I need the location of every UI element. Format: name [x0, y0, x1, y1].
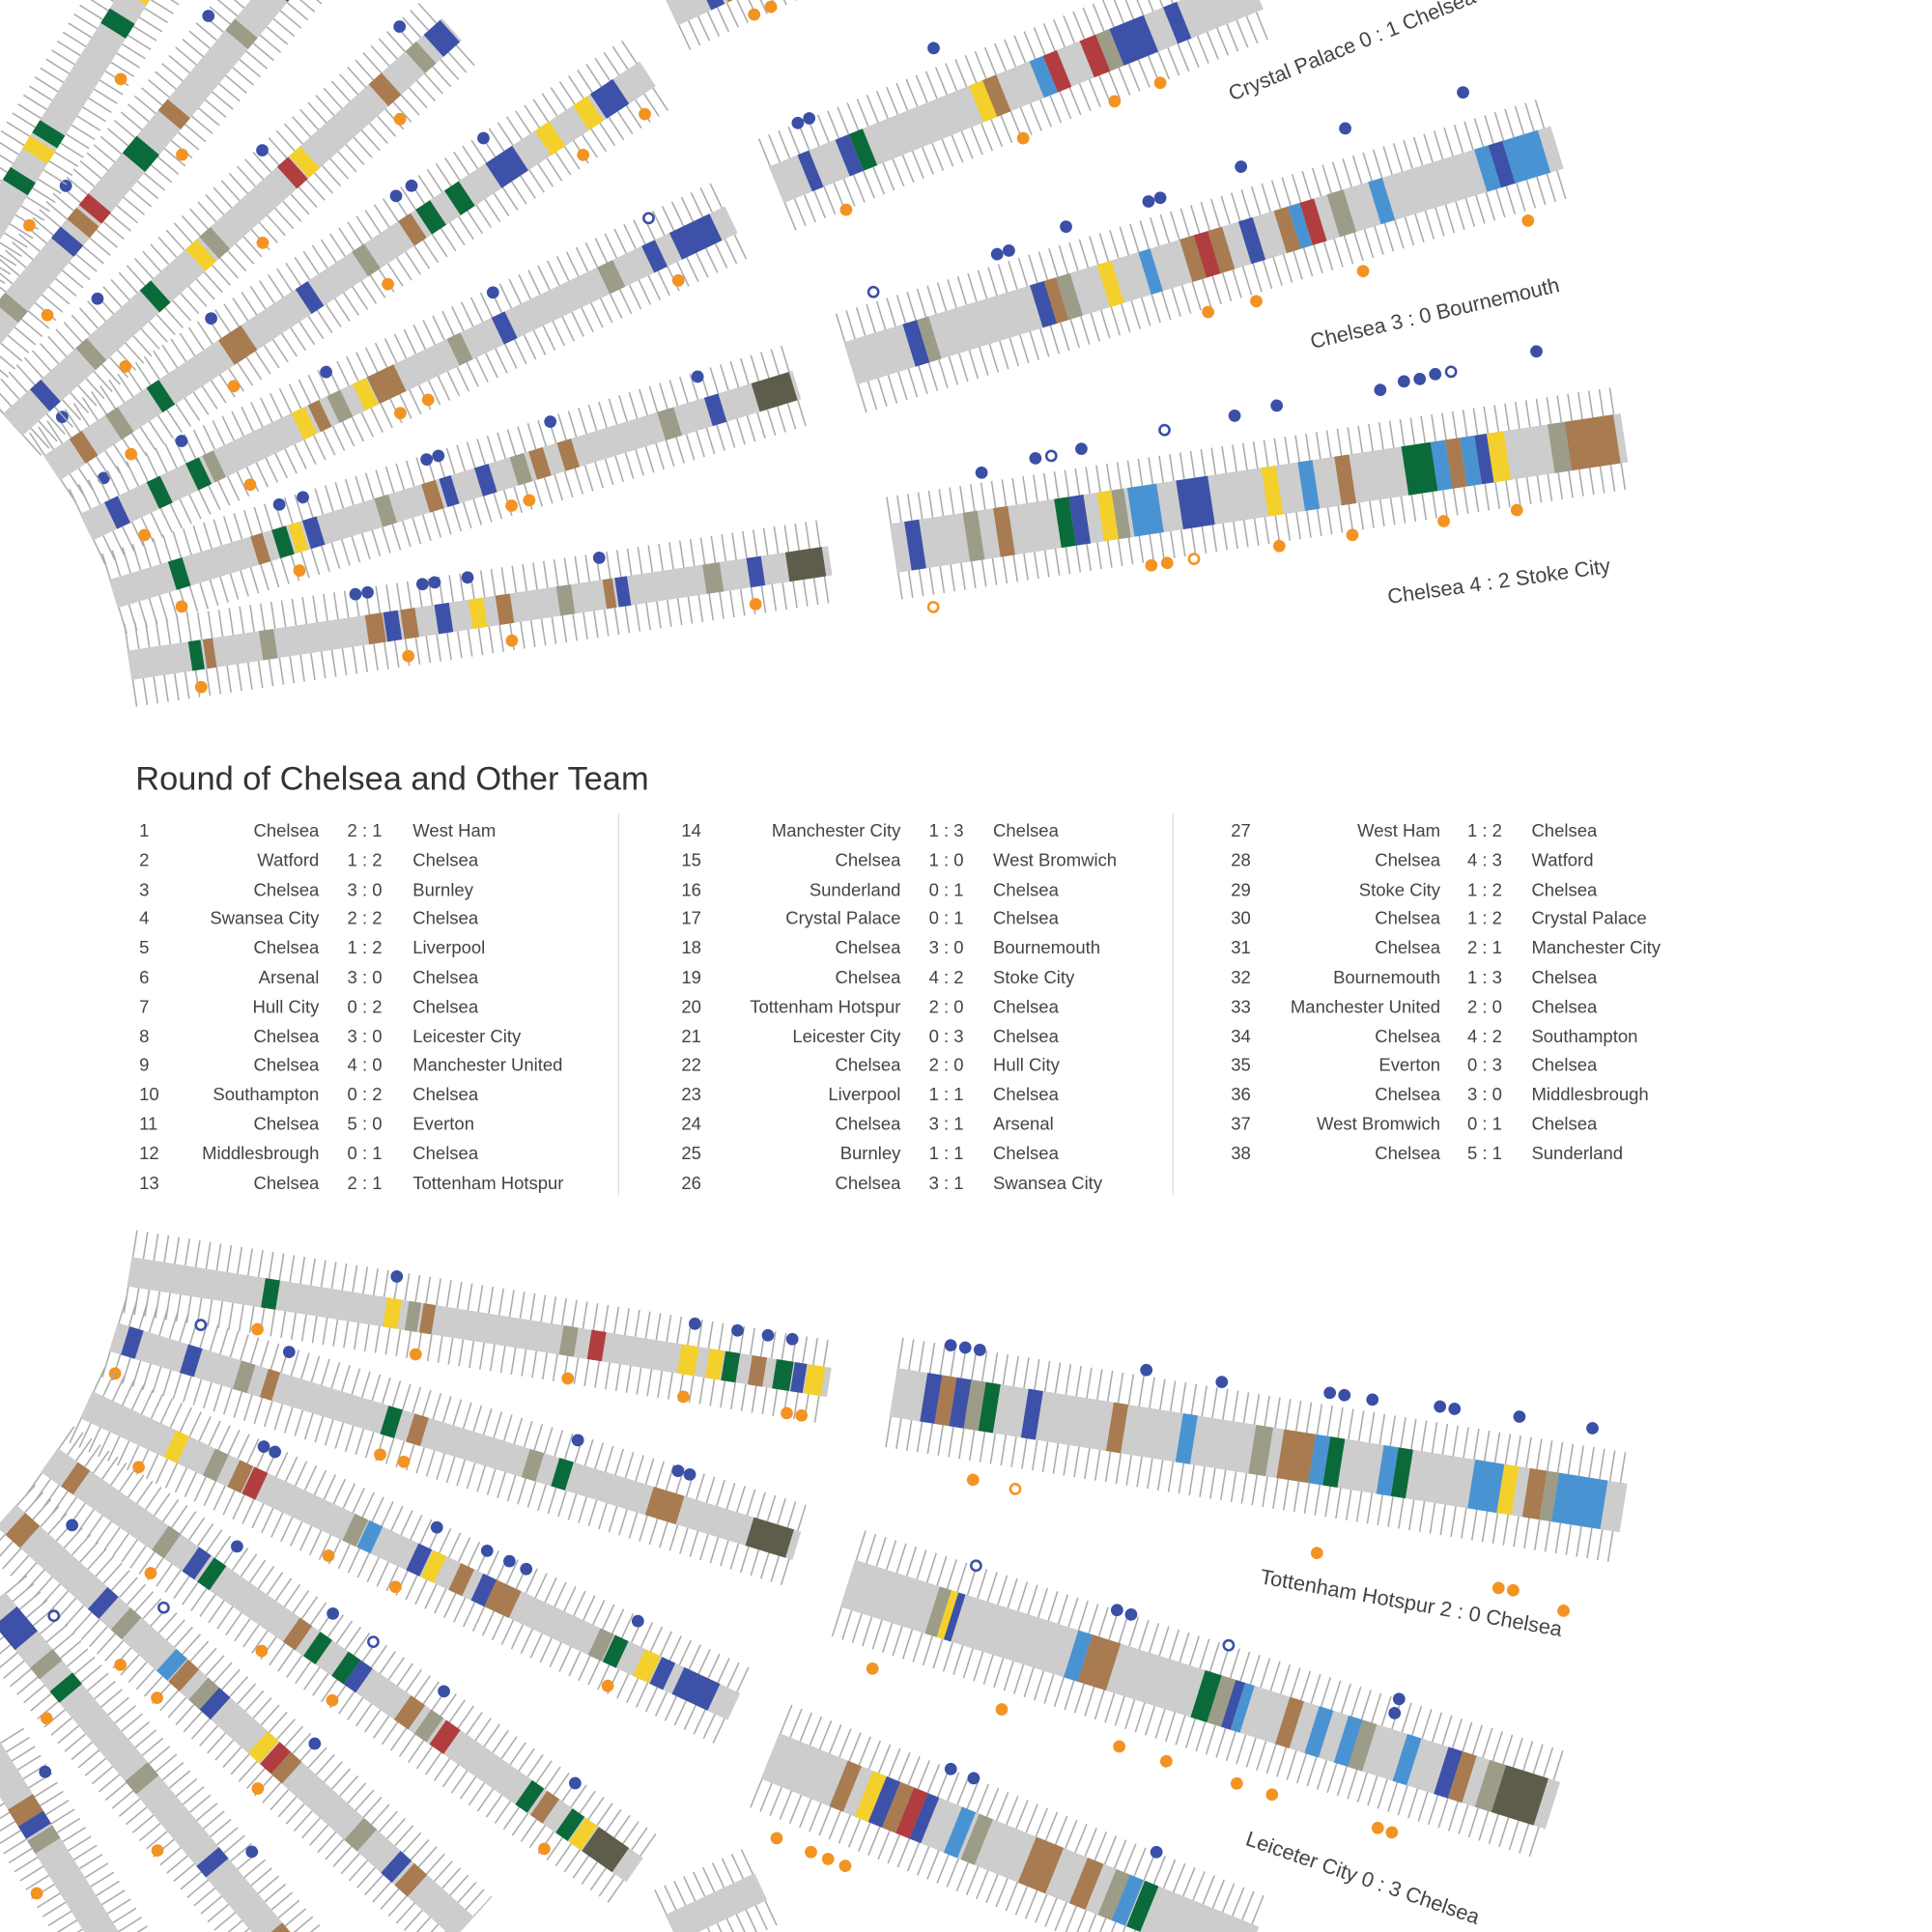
- table: rounds 27-38: Chelsea: [1375, 908, 1441, 928]
- table: rounds 1-13: Leicester City: [412, 1026, 522, 1046]
- table: rounds 1-13: Chelsea: [412, 850, 479, 870]
- table: rounds 27-38: Chelsea: [1375, 1143, 1441, 1163]
- table: rounds 27-38: 1 : 2: [1467, 820, 1502, 840]
- table: rounds 14-26: 15: [681, 850, 701, 870]
- table: rounds 14-26: 21: [681, 1026, 701, 1046]
- table: rounds 14-26: Arsenal: [993, 1114, 1054, 1134]
- table: rounds 14-26: 23: [681, 1084, 701, 1104]
- table: rounds 1-13: 13: [139, 1173, 159, 1193]
- table: rounds 27-38: Manchester United: [1291, 996, 1440, 1016]
- table: rounds 14-26: 24: [681, 1114, 701, 1134]
- table: rounds 27-38: 1 : 2: [1467, 879, 1502, 899]
- table: rounds 27-38: 37: [1231, 1114, 1251, 1134]
- bar group: top left fan: [0, 0, 837, 707]
- bar: bottom-left 4: [25, 1425, 660, 1904]
- table: rounds 27-38: Watford: [1531, 850, 1593, 870]
- label: Leiceter City 0:3 Chelsea: Leiceter City 0 : 3 Chelsea: [1243, 1827, 1484, 1929]
- table: rounds 27-38: 34: [1231, 1026, 1251, 1046]
- table: rounds 1-13: 8: [139, 1026, 149, 1046]
- table: rounds 14-26: Manchester City: [772, 820, 901, 840]
- table: rounds 14-26: 22: [681, 1054, 701, 1074]
- table: rounds 27-38: Everton: [1378, 1054, 1440, 1074]
- table: rounds 14-26: Chelsea: [993, 1026, 1060, 1046]
- title: Round of Chelsea and Other Team: [135, 761, 649, 798]
- bar: Tottenham Hotspur 2:0 Chelsea: [875, 1313, 1636, 1624]
- table: rounds 14-26: Chelsea: [836, 937, 901, 957]
- table: rounds 27-38: 32: [1231, 967, 1251, 987]
- table: rounds 1-13: 11: [139, 1114, 157, 1134]
- table: rounds 14-26: 17: [681, 908, 701, 928]
- table: rounds 27-38: Manchester City: [1531, 937, 1662, 957]
- table: rounds 14-26: Chelsea: [836, 1173, 901, 1193]
- table: rounds 14-26: 1 : 1: [929, 1143, 964, 1163]
- table: rounds 1-13: 5: [139, 937, 149, 957]
- table: rounds 27-38: 33: [1231, 996, 1251, 1016]
- table: rounds 1-13: Watford: [257, 850, 319, 870]
- table: rounds 1-13: Arsenal: [259, 967, 319, 987]
- table: rounds 27-38: Chelsea: [1531, 996, 1598, 1016]
- table: rounds 1-13: 9: [139, 1054, 149, 1074]
- table: rounds 27-38: West Ham: [1357, 820, 1440, 840]
- bar: top partial: [654, 0, 824, 51]
- table: rounds 14-26: Chelsea: [836, 1114, 901, 1134]
- bar: bottom-left 3: [69, 1366, 753, 1745]
- table: rounds 1-13: Burnley: [412, 879, 474, 899]
- table: rounds 27-38: 3 : 0: [1467, 1084, 1502, 1104]
- table: rounds 14-26: Chelsea: [993, 996, 1060, 1016]
- table: rounds 14-26: Crystal Palace: [785, 908, 900, 928]
- table: rounds 1-13: 5 : 0: [348, 1114, 383, 1134]
- bar: bottom-right 3: [740, 1698, 1273, 1932]
- label: Chelsea 3:0 Bournemouth: Chelsea 3 : 0 Bournemouth: [1308, 272, 1562, 354]
- table: rounds 27-38: West Bromwich: [1317, 1114, 1440, 1134]
- table: rounds 1-13: 10: [139, 1084, 159, 1104]
- table: rounds 27-38: 36: [1231, 1084, 1251, 1104]
- bar: bottom-left 5: [0, 1484, 493, 1932]
- table: rounds 27-38: Crystal Palace: [1531, 908, 1647, 928]
- table: rounds 1-13: Chelsea: [254, 1026, 320, 1046]
- table: rounds 14-26: Burnley: [840, 1143, 901, 1163]
- table: rounds 1-13: Hull City: [253, 996, 320, 1016]
- table: rounds 1-13: Everton: [412, 1114, 474, 1134]
- table: rounds 1-13: 2 : 1: [348, 1173, 383, 1193]
- table: rounds 27-38: Chelsea: [1375, 850, 1441, 870]
- bar: top-left 4: [28, 38, 670, 503]
- bar: top-left 1: [123, 518, 837, 707]
- bar: top-left 6: [0, 0, 340, 378]
- table: rounds 1-13: 4 : 0: [348, 1054, 383, 1074]
- table: rounds 14-26: 16: [681, 879, 701, 899]
- table: rounds 1-13: Southampton: [213, 1084, 319, 1104]
- table: rounds 1-13: [139, 820, 563, 1193]
- table: rounds 27-38: 4 : 3: [1467, 850, 1502, 870]
- table: rounds 14-26: Chelsea: [836, 967, 901, 987]
- table: rounds 27-38: 0 : 1: [1467, 1114, 1502, 1134]
- bar: Leicester City 0:3 Chelsea: [824, 1524, 1572, 1882]
- table: rounds 14-26: 25: [681, 1143, 701, 1163]
- dividers: [617, 813, 619, 1195]
- table: rounds 14-26: Chelsea: [993, 820, 1060, 840]
- table: rounds 1-13: 2: [139, 850, 149, 870]
- table: rounds 14-26: 0 : 1: [929, 879, 964, 899]
- bar: bottom-left 7: [0, 1727, 194, 1932]
- table: rounds 14-26: 19: [681, 967, 701, 987]
- table: rounds 1-13: 6: [139, 967, 149, 987]
- table: rounds 1-13: Middlesbrough: [202, 1143, 319, 1163]
- table: rounds 1-13: Chelsea: [254, 879, 320, 899]
- table: rounds 1-13: 3 : 0: [348, 967, 383, 987]
- table: rounds 27-38: 1 : 2: [1467, 908, 1502, 928]
- table: rounds 27-38: 28: [1231, 850, 1251, 870]
- table: rounds 14-26: 14: [681, 820, 701, 840]
- table: rounds 14-26: 1 : 3: [929, 820, 964, 840]
- table: rounds 14-26: Hull City: [993, 1054, 1061, 1074]
- table: rounds 14-26: Chelsea: [993, 1084, 1060, 1104]
- table: rounds 1-13: Chelsea: [412, 908, 479, 928]
- bar: bottom partial: [654, 1849, 779, 1932]
- table: rounds 1-13: 1: [139, 820, 149, 840]
- table: rounds 27-38: Chelsea: [1531, 967, 1598, 987]
- bar: top-left 3: [68, 181, 750, 565]
- table: rounds 14-26: 20: [681, 996, 701, 1016]
- table: rounds 27-38: Middlesbrough: [1531, 1084, 1649, 1104]
- table: rounds 27-38: Chelsea: [1375, 1026, 1441, 1046]
- table: rounds 1-13: Chelsea: [254, 1173, 320, 1193]
- table: rounds 27-38: Stoke City: [1359, 879, 1441, 899]
- table: rounds 1-13: Chelsea: [412, 1143, 479, 1163]
- table: rounds 27-38: Bournemouth: [1333, 967, 1440, 987]
- table: rounds 14-26: Chelsea: [836, 1054, 901, 1074]
- bar group: top right: [654, 0, 1634, 616]
- bar group: bottom right: [654, 1313, 1636, 1932]
- bar: Chelsea 3:0 Bournemouth: [825, 65, 1577, 428]
- table: rounds 27-38: 2 : 1: [1467, 937, 1502, 957]
- table: rounds 1-13: Swansea City: [210, 908, 320, 928]
- table: rounds 27-38: 30: [1231, 908, 1251, 928]
- table: rounds 14-26: 4 : 2: [929, 967, 964, 987]
- table: rounds 14-26: 1 : 0: [929, 850, 964, 870]
- table: rounds 1-13: 4: [139, 908, 149, 928]
- table: rounds 1-13: 12: [139, 1143, 159, 1163]
- table: rounds 14-26: Sunderland: [810, 879, 900, 899]
- table: rounds 14-26: 18: [681, 937, 701, 957]
- table: rounds 27-38: Chelsea: [1531, 820, 1598, 840]
- table: rounds 14-26: West Bromwich: [993, 850, 1117, 870]
- table: rounds 1-13: 2 : 1: [348, 820, 383, 840]
- bar: bottom-left 6: [0, 1574, 359, 1932]
- table: rounds 14-26: Stoke City: [993, 967, 1075, 987]
- table: rounds 14-26: 0 : 1: [929, 908, 964, 928]
- table: rounds 27-38: 38: [1231, 1143, 1251, 1163]
- table: rounds 14-26: 2 : 0: [929, 1054, 964, 1074]
- table: rounds 1-13: Tottenham Hotspur: [412, 1173, 563, 1193]
- table: rounds 27-38: 29: [1231, 879, 1251, 899]
- bar: top-left 7: [0, 0, 194, 294]
- table: rounds 14-26: 3 : 0: [929, 937, 964, 957]
- bar group: bottom left fan: [0, 1229, 836, 1932]
- bar: bottom-left 1: [123, 1229, 836, 1425]
- table: rounds 14-26: 3 : 1: [929, 1114, 964, 1134]
- table: rounds 1-13: 7: [139, 996, 149, 1016]
- table: rounds 1-13: 0 : 2: [348, 996, 383, 1016]
- table: rounds 27-38: 27: [1231, 820, 1251, 840]
- table: rounds 27-38: Chelsea: [1375, 1084, 1441, 1104]
- table: rounds 14-26: Bournemouth: [993, 937, 1100, 957]
- table: rounds 1-13: 2 : 2: [348, 908, 383, 928]
- table: rounds 14-26: 1 : 1: [929, 1084, 964, 1104]
- table: rounds 14-26: Swansea City: [993, 1173, 1103, 1193]
- table: rounds 1-13: 0 : 2: [348, 1084, 383, 1104]
- table: rounds 27-38: Chelsea: [1531, 879, 1598, 899]
- table: rounds 27-38: 0 : 3: [1467, 1054, 1502, 1074]
- table: rounds 1-13: West Ham: [412, 820, 496, 840]
- table: rounds 27-38: Chelsea: [1375, 937, 1441, 957]
- table: rounds 1-13: Chelsea: [254, 1114, 320, 1134]
- table: rounds 1-13: Chelsea: [412, 996, 479, 1016]
- table: rounds 1-13: 1 : 2: [348, 850, 383, 870]
- label: Tottenham Hotspur 2:0 Chelsea: Tottenham Hotspur 2 : 0 Chelsea: [1259, 1564, 1565, 1641]
- table: rounds 14-26: Liverpool: [828, 1084, 900, 1104]
- table: rounds 27-38: 31: [1231, 937, 1251, 957]
- table: rounds 14-26: Tottenham Hotspur: [750, 996, 900, 1016]
- table: rounds 27-38: Chelsea: [1531, 1114, 1598, 1134]
- table: rounds 14-26: 3 : 1: [929, 1173, 964, 1193]
- table: rounds 27-38: 5 : 1: [1467, 1143, 1502, 1163]
- table: rounds 1-13: Chelsea: [254, 937, 320, 957]
- table: rounds 14-26: Chelsea: [993, 879, 1060, 899]
- table: rounds 27-38: 35: [1231, 1054, 1251, 1074]
- bar: top-left 5: [0, 0, 480, 456]
- table: rounds 14-26: [681, 820, 1117, 1193]
- label: Chelsea 4:2 Stoke City: Chelsea 4 : 2 Stoke City: [1386, 554, 1612, 609]
- table: rounds 1-13: 3 : 0: [348, 1026, 383, 1046]
- table: rounds 14-26: 26: [681, 1173, 701, 1193]
- table: rounds 27-38: Chelsea: [1531, 1054, 1598, 1074]
- table: rounds 1-13: Chelsea: [412, 1084, 479, 1104]
- bar: Crystal Palace 0:1 Chelsea: [749, 0, 1277, 237]
- table: rounds 14-26: 2 : 0: [929, 996, 964, 1016]
- table: rounds 1-13: Chelsea: [254, 1054, 320, 1074]
- table: rounds 14-26: Leicester City: [792, 1026, 901, 1046]
- bar: bottom-left 2: [101, 1295, 810, 1586]
- table: rounds 27-38: 2 : 0: [1467, 996, 1502, 1016]
- table: rounds 1-13: Manchester United: [412, 1054, 562, 1074]
- table: rounds 14-26: 0 : 3: [929, 1026, 964, 1046]
- table: rounds 1-13: 3 : 0: [348, 879, 383, 899]
- table: rounds 27-38: 4 : 2: [1467, 1026, 1502, 1046]
- table: rounds 1-13: 1 : 2: [348, 937, 383, 957]
- table: rounds 27-38: Southampton: [1531, 1026, 1637, 1046]
- bar: Chelsea 4:2 Stoke City: [878, 334, 1634, 616]
- table: rounds 27-38: Sunderland: [1531, 1143, 1623, 1163]
- table: rounds 1-13: 0 : 1: [348, 1143, 383, 1163]
- bar: top-left 2: [100, 344, 809, 634]
- table: rounds 14-26: Chelsea: [993, 1143, 1060, 1163]
- table: rounds 1-13: Chelsea: [254, 820, 320, 840]
- table: rounds 1-13: Liverpool: [412, 937, 485, 957]
- table: rounds 1-13: Chelsea: [412, 967, 479, 987]
- table: rounds 14-26: Chelsea: [836, 850, 901, 870]
- table: rounds 27-38: 1 : 3: [1467, 967, 1502, 987]
- table: rounds 1-13: 3: [139, 879, 149, 899]
- table: rounds 27-38: [1231, 820, 1662, 1163]
- table: rounds 14-26: Chelsea: [993, 908, 1060, 928]
